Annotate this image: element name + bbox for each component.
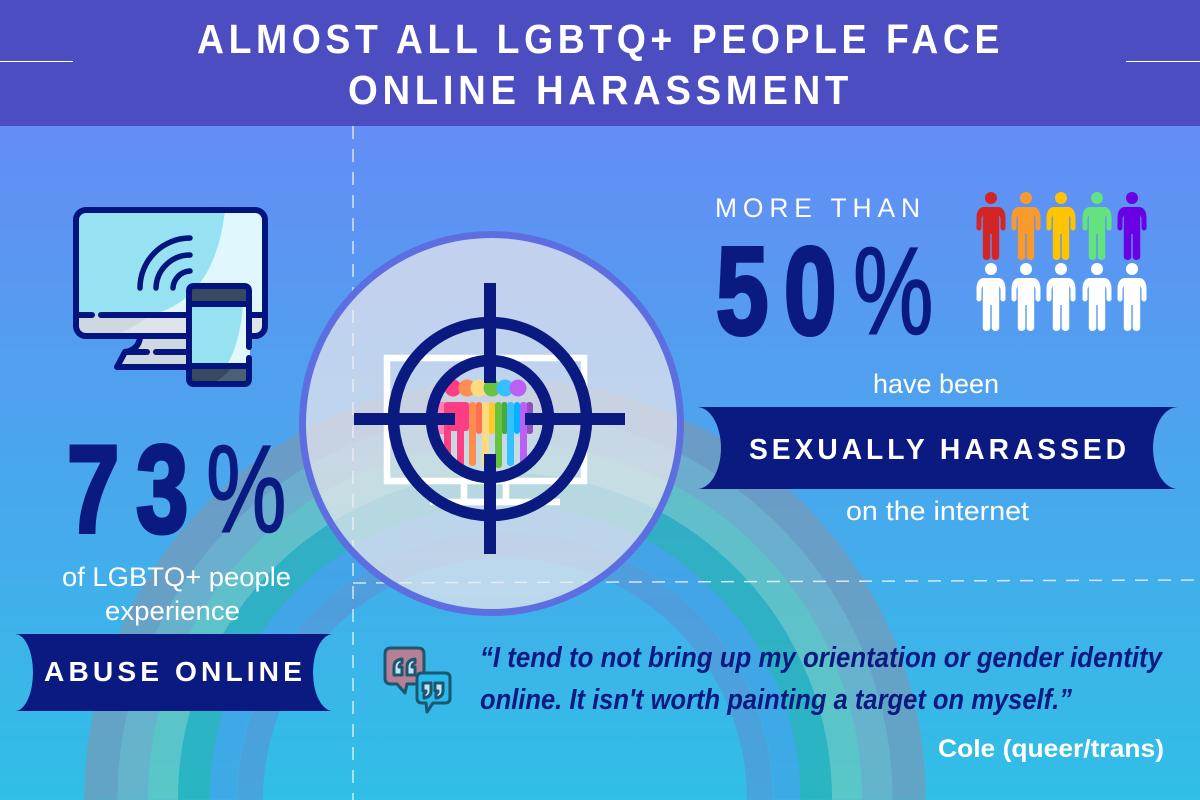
stat: 50% [716, 223, 933, 361]
title: ALMOST ALL LGBTQ+ PEOPLE FACE [197, 16, 1004, 62]
label: more than: MORE THAN [715, 193, 926, 223]
text: of LGBTQ+ people experience: of LGBTQ+ people [62, 562, 291, 592]
coloured people row [976, 192, 1146, 260]
rainbow arcs [101, 396, 909, 800]
stat: 73%: 7 [67, 421, 119, 559]
banner: abuse online [15, 634, 333, 711]
text: have been: have been [873, 369, 999, 399]
stat: 73%: % [206, 421, 286, 559]
banner: sexually harassed: SEXUALLY HARASSED [749, 434, 1130, 466]
stat: 73% [67, 421, 286, 559]
target circle [302, 234, 680, 612]
title: ONLINE HARASSMENT [348, 67, 853, 113]
icon: rainbow group of people [437, 380, 533, 468]
stat: 73%: 3 [136, 421, 188, 559]
icon: crosshair [354, 283, 625, 554]
stat: 50%: % [853, 223, 933, 361]
banner: abuse online: ABUSE ONLINE [44, 656, 306, 687]
icon: monitor and phone with wifi [76, 210, 265, 385]
header band [0, 0, 1200, 126]
text: of LGBTQ+ people experience [62, 562, 291, 626]
white people row [976, 263, 1146, 331]
quote attribution: Cole (queer/trans) [938, 735, 1164, 763]
title [197, 16, 1004, 113]
icon: quote bubbles [385, 648, 450, 712]
text: on the internet: on the internet [846, 496, 1030, 526]
icon: white monitor outline [387, 358, 584, 502]
quote text: online. It isn't worth painting a target on myself.” [480, 684, 1072, 716]
banner: sexually harassed [697, 407, 1178, 489]
stat: 50%: 0 [784, 223, 836, 361]
dashed dividers [353, 126, 1200, 800]
icon: ten people pictogram [976, 192, 1146, 331]
quote text [480, 642, 1164, 716]
text: of LGBTQ+ people experience: experience [105, 596, 240, 626]
stat: 50%: 5 [716, 223, 768, 361]
